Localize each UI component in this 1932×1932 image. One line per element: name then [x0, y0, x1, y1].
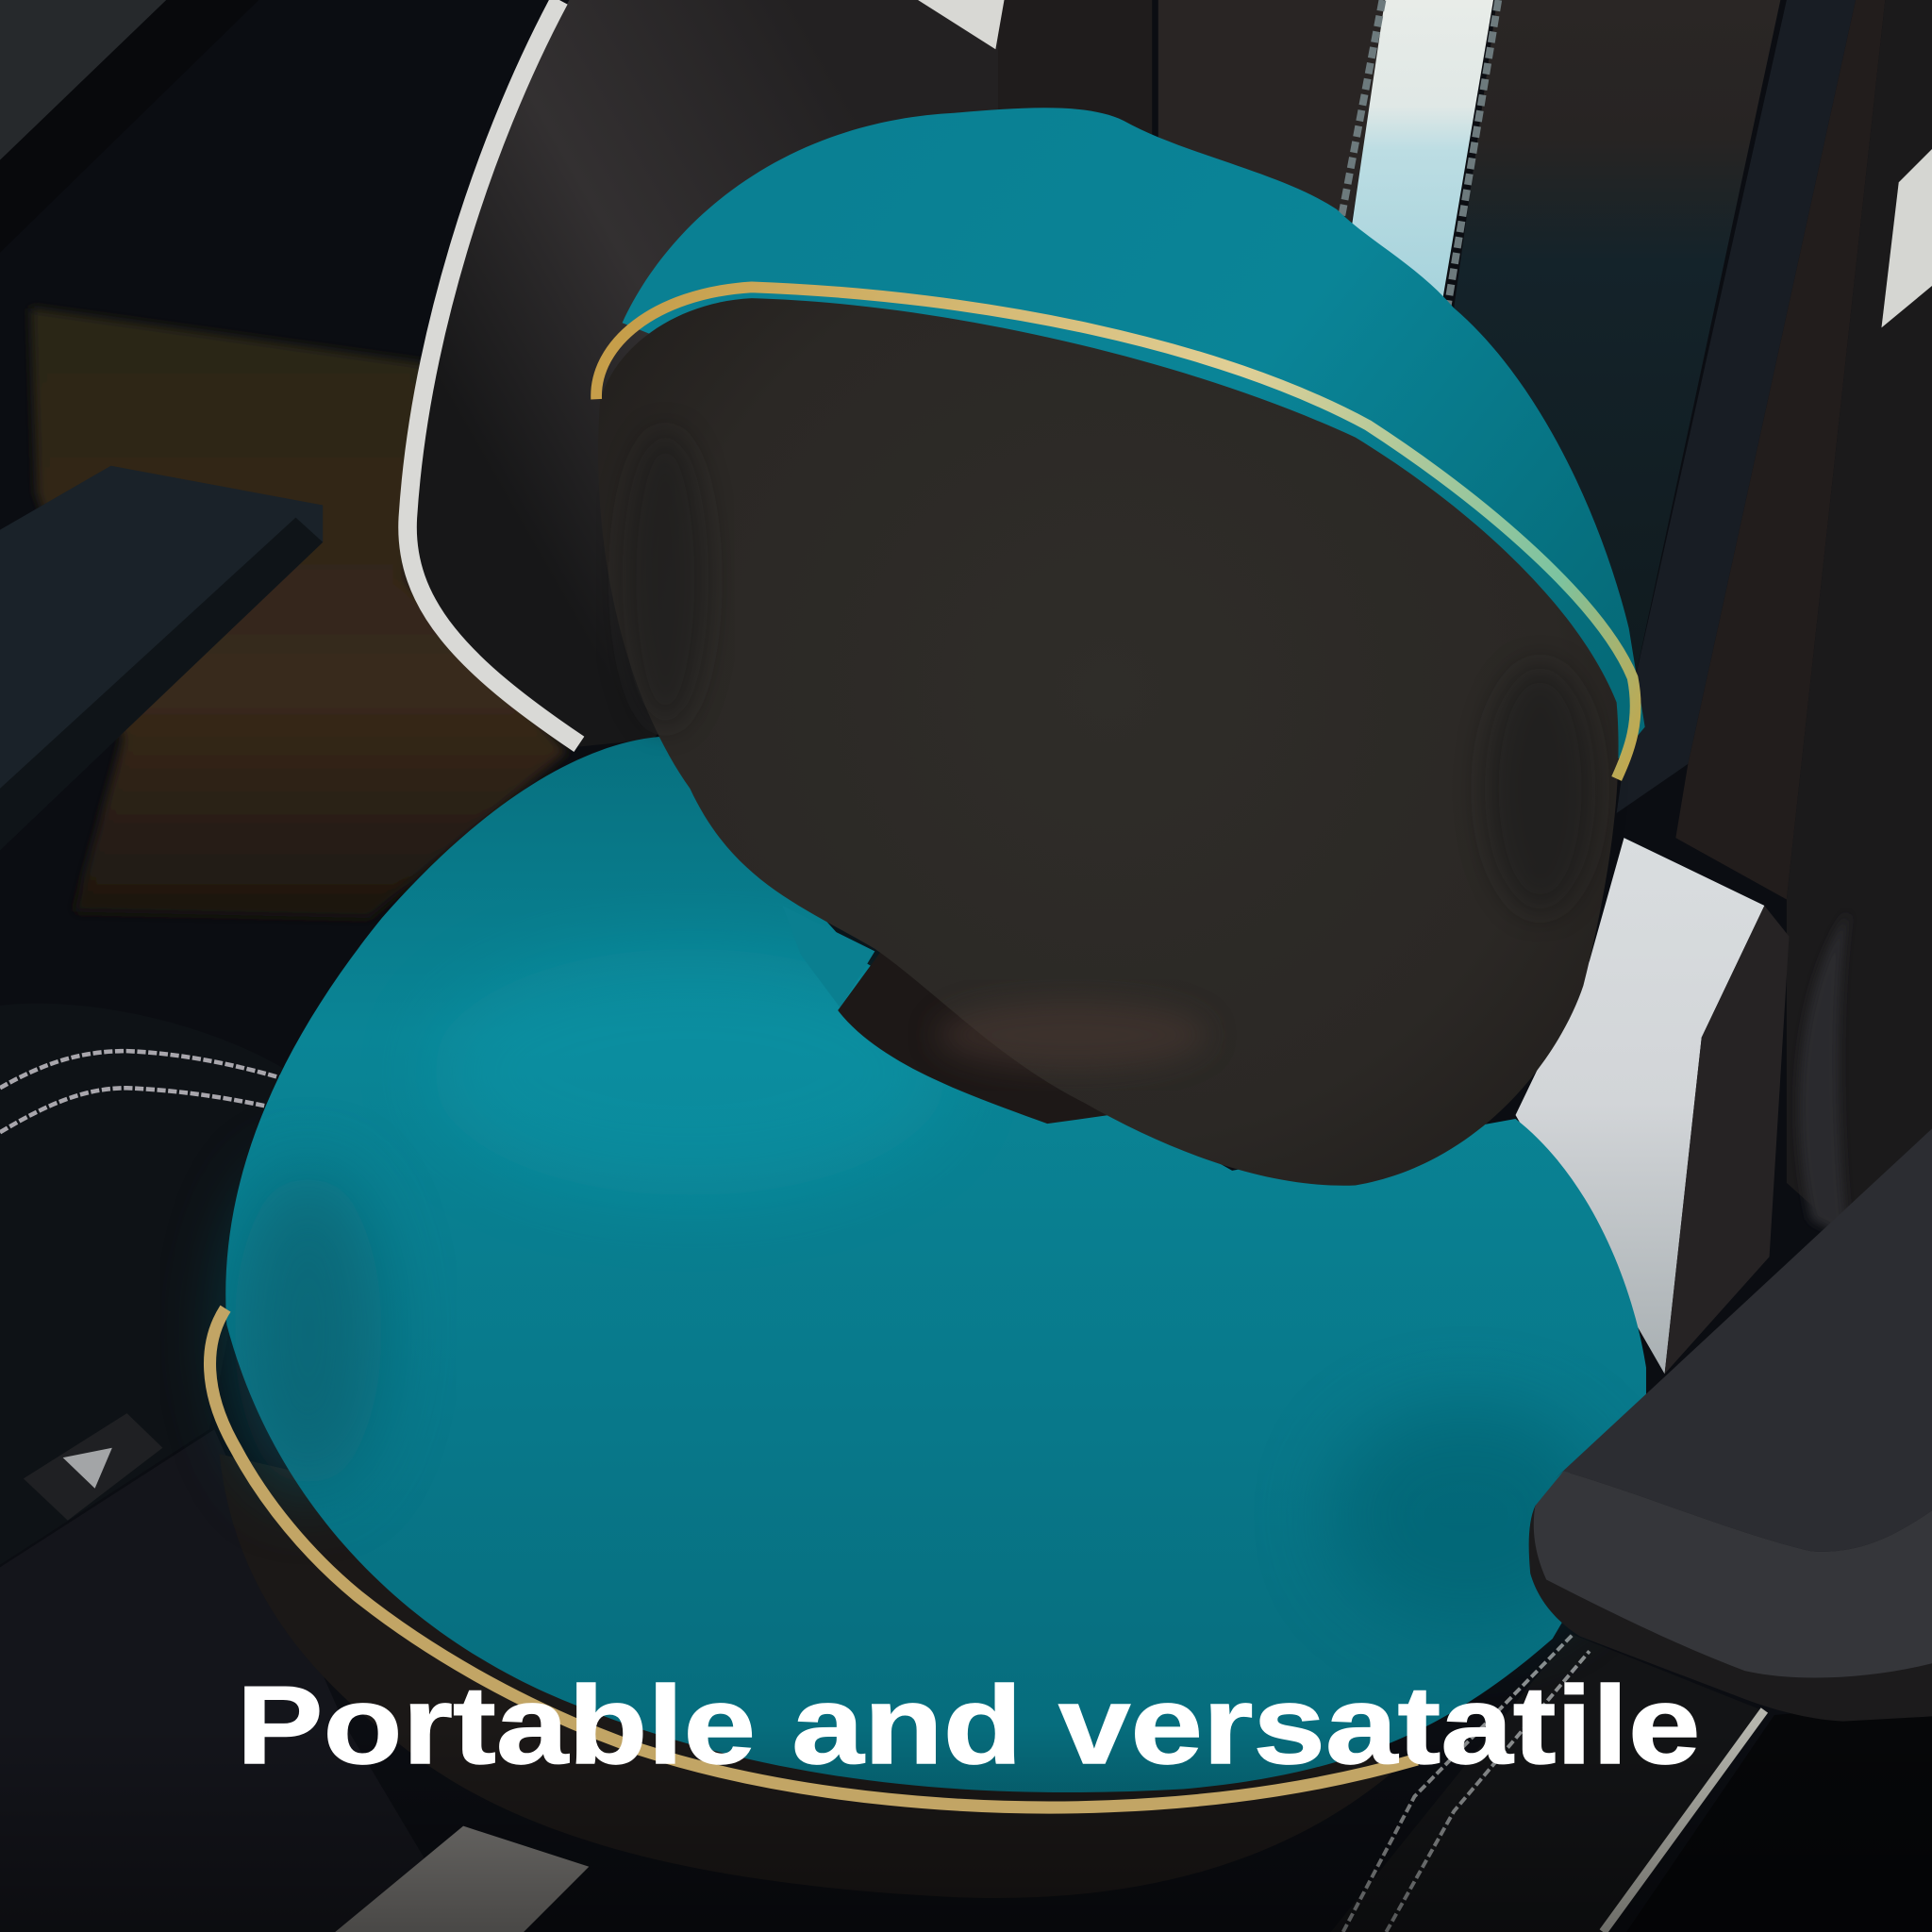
white tag far right [1881, 149, 1932, 327]
chair white top corner [918, 0, 1004, 49]
armrest on right [1529, 1128, 1932, 1722]
white seat piping bottom right [1603, 1710, 1764, 1932]
big teal neck pillow [219, 737, 1646, 1898]
pillow teal body [225, 737, 1646, 1792]
brown floor area behind chair [31, 308, 567, 918]
face left shading [623, 431, 708, 727]
pillow highlight [431, 949, 949, 1195]
pillow underside dark [219, 1454, 1405, 1898]
armrest band [1534, 1472, 1932, 1678]
dark face [598, 298, 1619, 1186]
gold piping on big pillow [210, 1308, 1417, 1807]
armrest lip [1529, 1128, 1932, 1722]
chair back left panel [986, 0, 1152, 160]
white cushion on right [1516, 838, 1764, 1374]
small head pillow [596, 108, 1645, 1186]
teal top [623, 108, 1645, 764]
bottom dark fade [0, 1725, 1932, 1932]
face right shading [1485, 665, 1595, 912]
chair back centre panel [1158, 0, 1392, 234]
chair white stripe [1352, 0, 1493, 298]
seat bottom [0, 1429, 468, 1932]
left desk surfaces [0, 0, 166, 160]
bottom right seat [1331, 1634, 1762, 1932]
face lower warm fold [937, 1001, 1208, 1070]
pillow centre hole [838, 951, 1109, 1124]
chair white piping left [408, 0, 579, 744]
stitching bottom right [1343, 1634, 1590, 1932]
small teal fold in hole [782, 906, 874, 1008]
lower-left seat bolster [0, 1004, 290, 1565]
right chair edge [1787, 0, 1932, 1239]
seat stripe bottom [335, 1826, 589, 1932]
seat tag with logo [24, 1413, 162, 1521]
gold piping on head pillow [596, 287, 1636, 778]
chair side wing [412, 0, 998, 747]
pillow right shadow [1331, 1405, 1602, 1626]
pillow left shadow [234, 1171, 382, 1491]
title: Portable and versatatile [237, 1663, 1700, 1787]
armrest top [1555, 1128, 1932, 1552]
dark panel right of cushion [1665, 906, 1789, 1374]
chair dark strap [1617, 0, 1856, 813]
